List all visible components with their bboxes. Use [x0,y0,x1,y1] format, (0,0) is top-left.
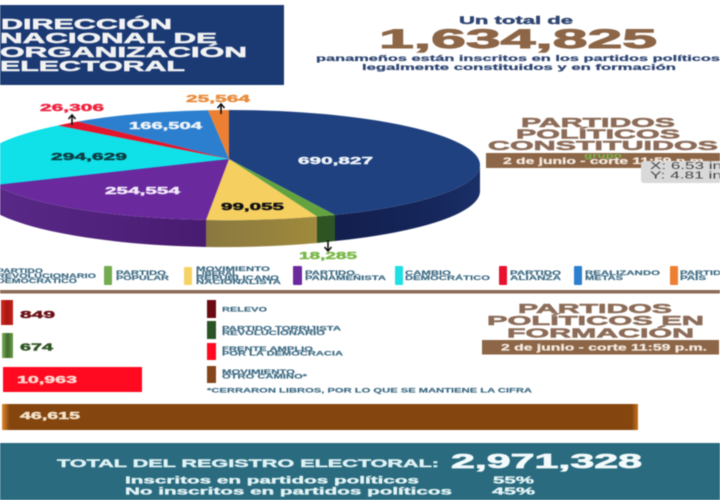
heading: partidos políticos en formación: FORMACIÓN [507,326,694,340]
pie value labels: 25,564 [186,93,250,105]
legend item: Cambio Democrático [395,266,491,285]
heading: partidos políticos constituidos: CONSTITUIDOS [488,138,719,153]
registered share: Inscritos en partidos políticos [125,476,420,486]
unregistered share: 45% [492,486,535,498]
heading: partidos políticos constituidos: POLÍTICOS [516,126,681,142]
registered share [125,476,534,486]
legend item: MOLIRENA: REPUBLICANO [196,276,280,282]
slice: Cambio Democrático [0,126,229,187]
slice: Partido País [208,110,229,159]
arrows to small slices [68,104,332,251]
bar chart: parties in formation [1,300,638,430]
legend item: Otro Camino: OTRO CAMINO* [222,374,308,380]
legend item: Partido Popular [104,266,170,285]
pie value labels: 18,285 [299,250,357,262]
legend item: Partido País: PARTIDO [680,271,720,277]
legend: parties in formation [207,300,533,394]
heading: partidos políticos constituidos [486,115,720,168]
slice: Partido Revolucionario Democrático [229,110,480,215]
legend item: Partido Popular: POPULAR [116,276,170,282]
pie value labels: 294,629 [51,151,127,163]
bar: Otro Camino 46,615 [2,404,638,430]
legend item: Otro Camino [207,366,308,383]
chart: 3D pie of constituted parties [0,93,480,262]
slice: Realizando Metas [78,110,229,159]
legend item: Partido Alianza: ALIANZA [510,276,562,282]
bar: Relevo 849: 849 [20,309,55,321]
legend item: Cambio Democrático: CAMBIO [405,271,452,277]
heading: partidos políticos en formación: PARTIDOS [518,301,673,316]
subtitle text [316,53,720,72]
subtitle text: panameños están inscritos en los partidos políticos [316,53,720,63]
panel: electoral register total [0,443,720,500]
date bar [482,340,719,354]
legend item: Otro Camino: MOVIMIENTO [222,370,296,376]
registered share: 55% [493,476,534,486]
legend item: Realizando Metas [574,266,661,285]
pie value labels: 254,554 [105,185,180,197]
bar: Frente Amplio 10,963: 10,963 [17,374,77,386]
legend item: Panameñista: PARTIDO [305,271,356,277]
footnote: *CERRARON LIBROS, POR LO QUE SE MANTIENE LA CIFRA [207,388,533,394]
tooltip: coordinates [641,160,720,183]
title: Dirección Nacional de Organización Electoral: ELECTORAL [0,58,185,75]
big number: 1,634,825: 1,634,825 [379,24,657,54]
legend item: Relevo [207,300,268,318]
date bar: 2 de junio - corte 11:59 p.m. [503,156,708,166]
pie value labels: 99,055 [221,201,284,213]
bar: Relevo 849 [1,300,55,325]
heading: partidos políticos constituidos: PARTIDOS [521,115,676,130]
headline: total registered [316,15,720,72]
legend item: MOLIRENA: MOVIMIENTO [196,267,271,273]
date bar: 2 de junio - corte 11:59 p.m. [501,342,707,352]
slice: Partido Panameñista [0,159,229,220]
legend item: Frente Amplio [207,343,344,360]
pie value labels: 26,306 [40,102,104,114]
legend item: Partido Torrijista Revolucionario: REVOLUCIONARIO [222,331,326,337]
heading: partidos políticos en formación [482,301,719,354]
slice: Movimiento Liberal Republicano Nacionalista [206,159,317,220]
legend item: Partido Alianza [499,266,562,285]
watermark: small green text: grupo [584,153,622,160]
legend item: PRD [0,269,97,285]
title: Dirección Nacional de Organización Electoral: DIRECCIÓN [1,15,172,33]
legend item: Partido Torrijista Revolucionario: PARTIDO TORRIJISTA [222,326,342,332]
date bar [486,153,720,168]
legend item: Partido Popular: PARTIDO [116,271,167,277]
total label: TOTAL DEL REGISTRO ELECTORAL: [57,458,439,470]
heading: partidos políticos en formación: POLÍTICOS EN [487,313,704,328]
legend: constituted parties [0,266,720,286]
bar: Partido Torrijista Revolucionario 674: 674 [20,342,53,354]
legend item: Partido Alianza: PARTIDO [510,271,562,277]
panel: title block [0,5,284,85]
legend item: Cambio Democrático: DEMOCRÁTICO [405,275,491,282]
bar: Partido Torrijista Revolucionario 674 [2,333,53,358]
title: Dirección Nacional de Organización Electoral: ORGANIZACIÓN [0,43,247,61]
unregistered share [125,486,535,498]
legend item: MOLIRENA [184,267,282,286]
legend item: Panameñista: PANAMEÑISTA [305,275,387,282]
total number: 2,971,328 [451,451,642,473]
title: Dirección Nacional de Organización Electoral [0,15,247,75]
legend item: Realizando Metas: METAS [585,276,623,282]
legend item: Partido País [670,266,720,285]
legend item: Realizando Metas: REALIZANDO [585,271,661,277]
legend item: Panameñista [293,266,387,285]
pie value labels: 166,504 [129,120,202,132]
legend item: MOLIRENA: LIBERAL [196,272,239,278]
legend item: Partido Torrijista Revolucionario [207,321,342,339]
tooltip: coordinates: Y: 4.81 in [650,170,720,182]
legend item: Frente Amplio: POR LA DEMOCRACIA [222,352,344,358]
pie value labels [40,93,373,262]
title: Dirección Nacional de Organización Electoral: NACIONAL DE [0,30,217,47]
bar: Frente Amplio 10,963 [3,367,142,392]
unregistered share: No inscritos en partidos políticos [125,486,453,498]
subtitle text: legalmente constituidos y en formación [362,62,676,72]
slice: Partido Alianza [58,122,229,159]
legend item: Frente Amplio: FRENTE AMPLIO [222,347,314,353]
pie value labels: 690,827 [298,155,373,167]
legend item: Partido País: PAÍS [680,274,706,282]
slice: Partido Popular [229,159,335,216]
bar: Otro Camino 46,615: 46,615 [20,410,80,422]
legend item: MOLIRENA: NACIONALISTA [196,280,282,286]
headline: total registered: Un total de [459,15,573,27]
legend item: Relevo: RELEVO [222,308,268,314]
pie side wall [0,165,480,247]
tooltip: coordinates: X: 6.53 in [650,160,720,172]
